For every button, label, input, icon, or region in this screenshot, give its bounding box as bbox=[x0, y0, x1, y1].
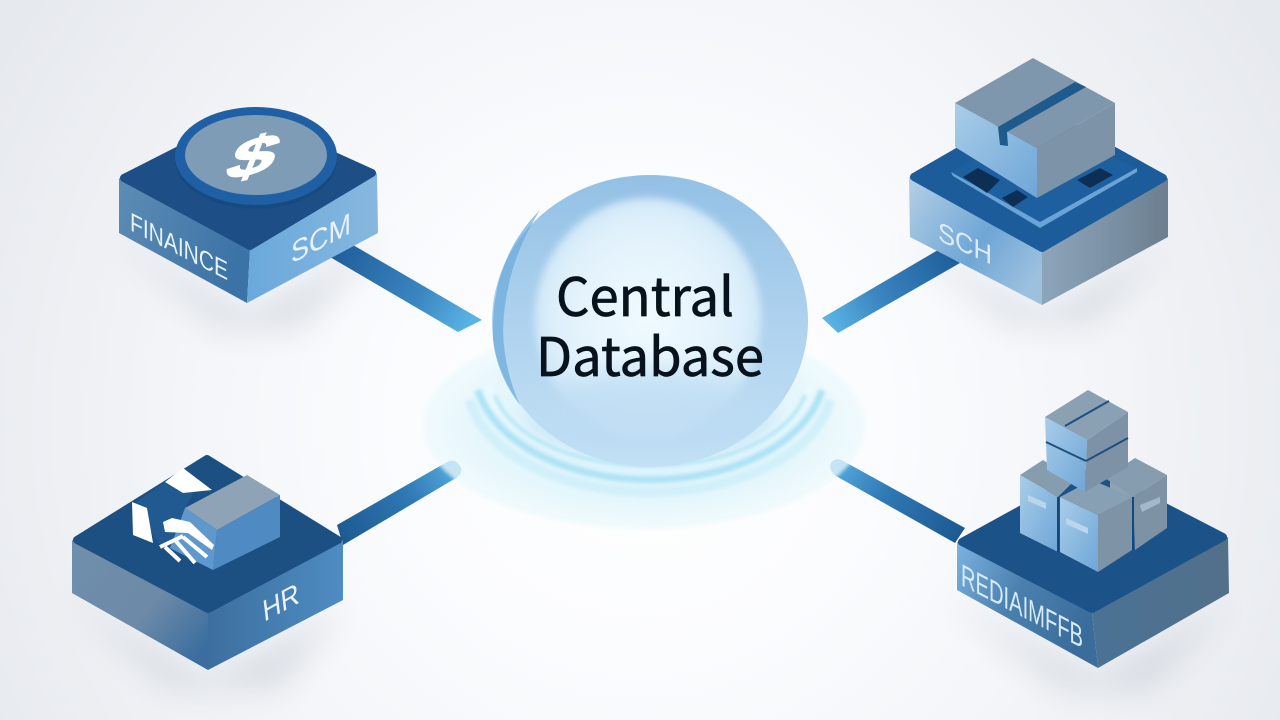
handshake icon bbox=[132, 468, 280, 570]
right face bbox=[208, 540, 343, 670]
top face bbox=[124, 116, 372, 246]
label: SCM on finance block: SCM bbox=[291, 206, 351, 271]
right face bbox=[1042, 178, 1168, 305]
coin icon bbox=[175, 107, 337, 209]
sphere bbox=[492, 175, 808, 467]
title bbox=[536, 256, 764, 392]
top face bbox=[962, 470, 1223, 609]
left face bbox=[957, 542, 1098, 668]
connector: HR to database bbox=[337, 461, 461, 545]
right face bbox=[247, 173, 378, 303]
block: HR bbox=[72, 459, 343, 670]
left face bbox=[909, 177, 1042, 305]
left face bbox=[72, 540, 208, 670]
right box bbox=[1105, 458, 1167, 550]
block: finance bbox=[119, 107, 378, 303]
title: Database bbox=[536, 316, 764, 392]
front box bbox=[1058, 480, 1133, 572]
coin icon: $ bbox=[217, 120, 290, 194]
block: redundant storage bbox=[957, 390, 1229, 668]
label: finance: FINAINCE bbox=[130, 207, 228, 286]
top face bbox=[77, 459, 338, 609]
connector: SCM to database bbox=[822, 250, 960, 333]
left box bbox=[1020, 460, 1075, 552]
box icon bbox=[955, 58, 1115, 198]
top box bbox=[1045, 390, 1128, 492]
glow rings bbox=[422, 321, 866, 529]
left face bbox=[119, 178, 250, 303]
label: SCH: SCH bbox=[938, 216, 992, 271]
right face bbox=[1092, 537, 1229, 668]
title: Central bbox=[556, 256, 734, 332]
connector: finance to database bbox=[330, 245, 482, 332]
label: redundant storage: REDIAIMFFB bbox=[961, 557, 1083, 655]
label: HR: HR bbox=[261, 576, 301, 629]
central database bbox=[422, 175, 866, 529]
top face bbox=[914, 107, 1163, 248]
stacked boxes icon bbox=[1020, 390, 1167, 572]
block shadows bbox=[62, 235, 1232, 690]
pallet bbox=[951, 125, 1137, 228]
connector: redundant storage to database bbox=[830, 459, 965, 543]
block: SCM bbox=[909, 58, 1168, 305]
